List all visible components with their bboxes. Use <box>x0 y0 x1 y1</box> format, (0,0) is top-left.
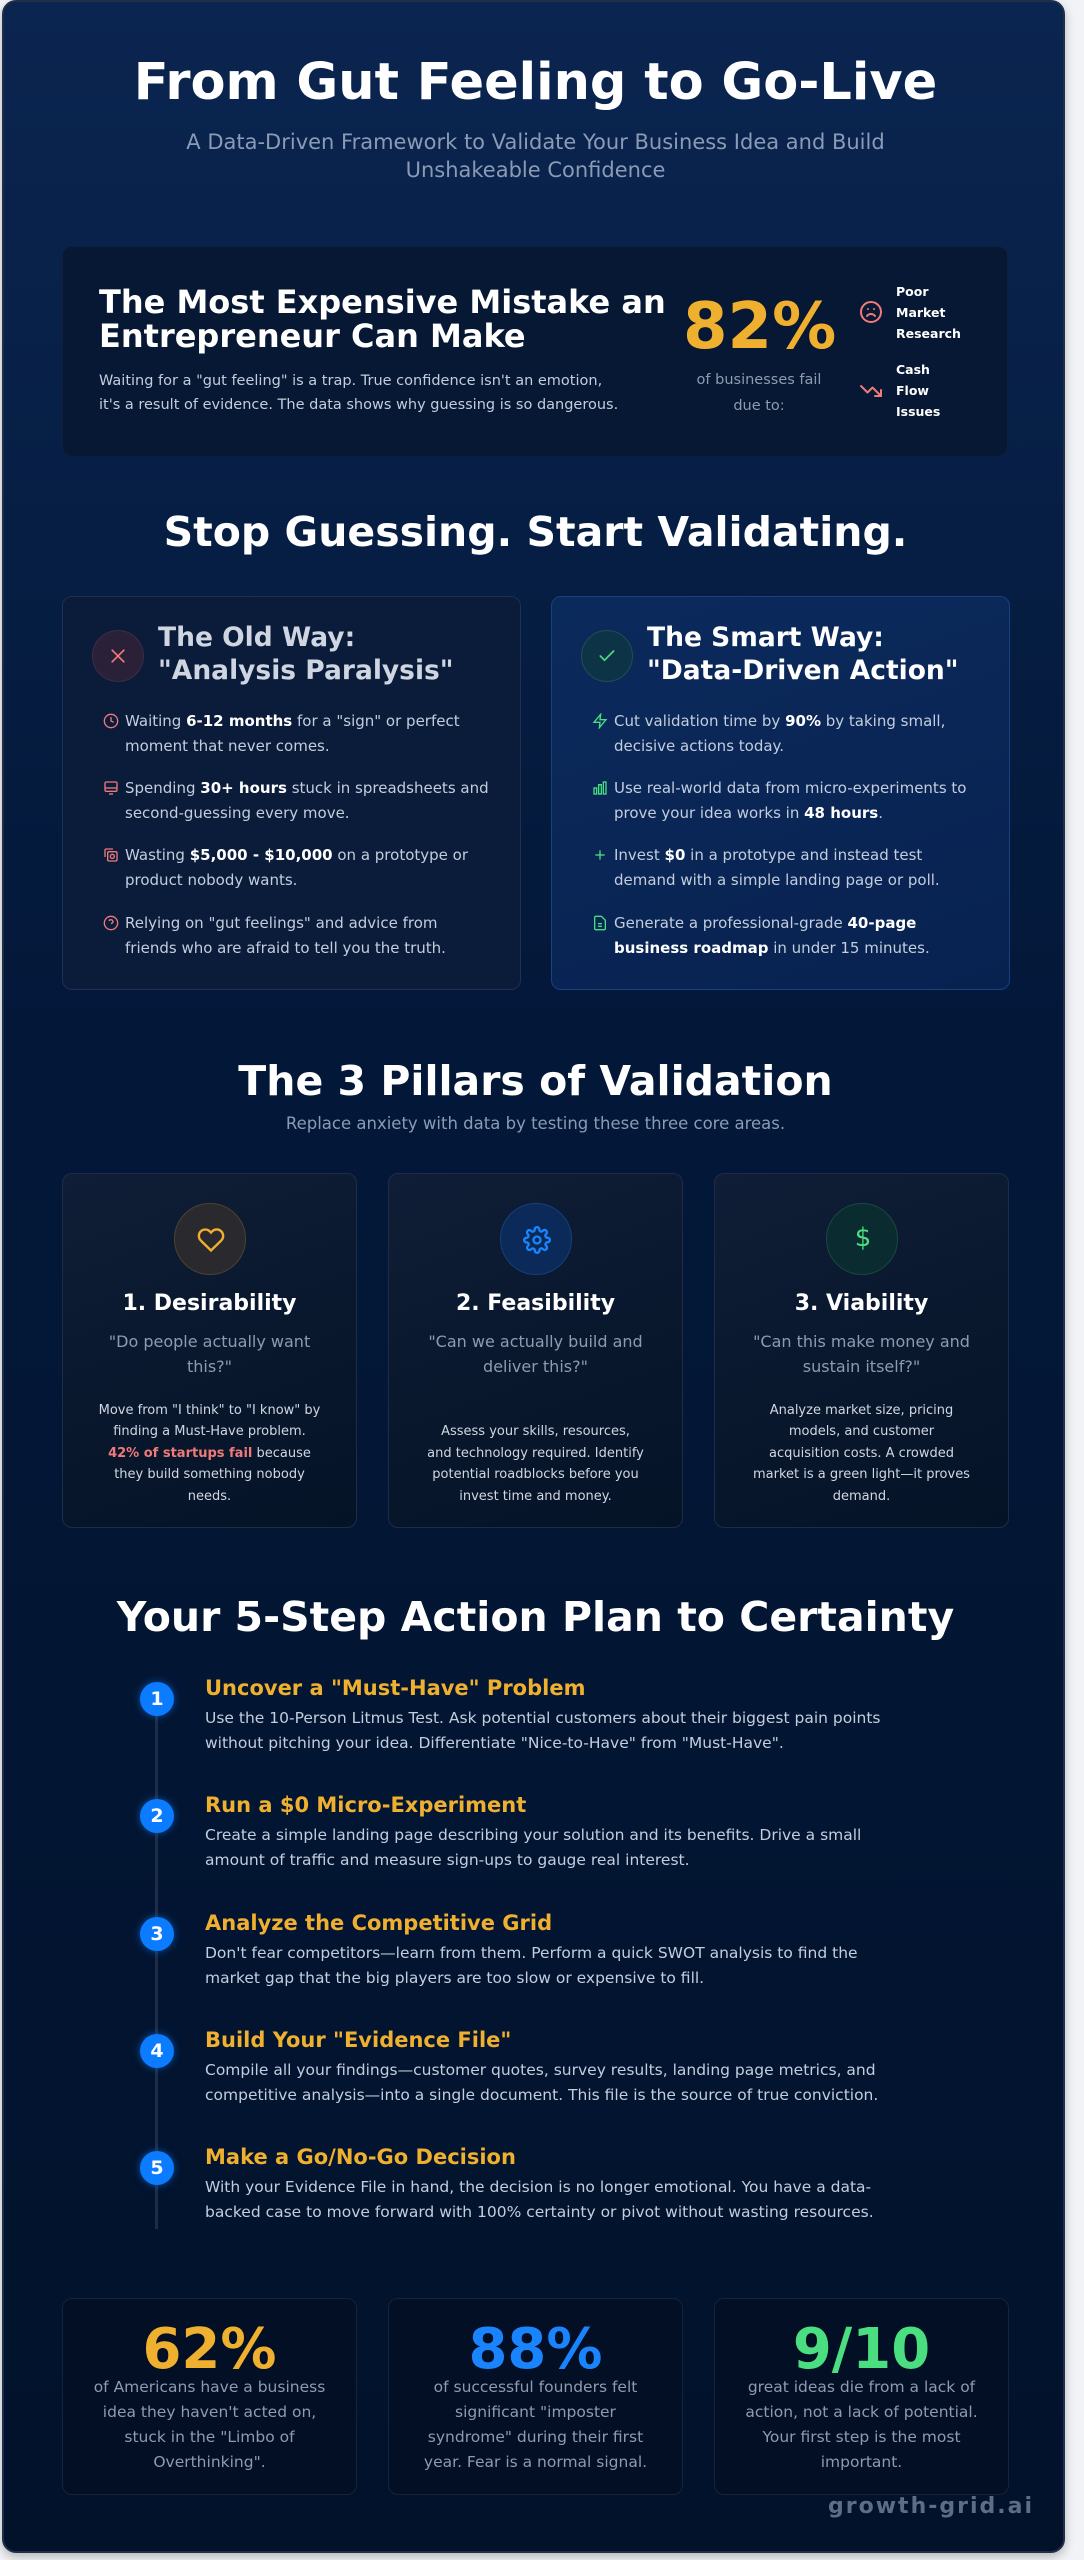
pillar: viability: models, and customer <box>789 1424 934 1439</box>
stat: 62%: 62% <box>142 2317 277 2382</box>
pillar: viability <box>714 1173 1009 1528</box>
icon: trend down <box>860 385 882 397</box>
stat: 9/10: great ideas die from a lack of action, not a lack of potential. Your first step is the most important. <box>745 2378 978 2471</box>
label: cash flow issues: Cash <box>896 362 930 377</box>
timeline: Use the 10-Person Litmus Test. Ask potential customers about their biggest pain points without pitching your idea. Differentiate "Nice-to-Have" from "Must-Have". <box>205 1709 880 1752</box>
pillar: feasibility <box>388 1173 683 1528</box>
label: poor market research: Research <box>896 326 961 341</box>
heading: stop guessing: Stop Guessing. Start Validating. <box>164 508 907 556</box>
stat: 82%: due to: <box>733 398 785 414</box>
heading: 3 pillars: The 3 Pillars of Validation <box>238 1057 833 1105</box>
list items <box>104 712 489 957</box>
timeline: Compile all your findings—customer quotes, survey results, landing page metrics, and competitive analysis—into a single document. This file is the source of true conviction. <box>205 2061 878 2104</box>
footer brand: growth-grid.ai <box>828 2494 1034 2519</box>
pillar: feasibility: "Can we actually build and deliver this?" <box>428 1332 643 1376</box>
subtitle: A Data-Driven Framework to Validate Your Business Idea and Build Unshakeable Confidence <box>186 130 885 182</box>
pillar: feasibility: Assess your skills, resources, <box>441 1424 630 1439</box>
stat: 88% <box>388 2298 683 2495</box>
label: poor market research <box>896 284 961 341</box>
step 5 <box>135 2145 874 2221</box>
heading <box>158 622 454 686</box>
pillar: feasibility: 2. Feasibility <box>456 1291 615 1316</box>
heading: The Old Way: <box>158 622 355 653</box>
timeline: Uncover a "Must-Have" Problem <box>205 1676 585 1700</box>
list items: Use real-world data from micro-experiments to prove your idea works in 48 hours. <box>614 779 966 822</box>
pillar: viability: "Can this make money and sustain itself?" <box>753 1332 970 1376</box>
timeline: Analyze the Competitive Grid <box>205 1911 552 1935</box>
label: poor market research: Poor <box>896 284 929 299</box>
list items: Wasting $5,000 - $10,000 on a prototype or product nobody wants. <box>125 846 468 889</box>
pillar: viability: acquisition costs. A crowded <box>769 1446 954 1460</box>
icon: dollar: $ <box>855 1223 871 1253</box>
timeline: Create a simple landing page describing your solution and its benefits. Drive a small amount of traffic and measure sign-ups to gauge real interest. <box>205 1826 861 1869</box>
stat: 82%: of businesses fail <box>697 372 821 388</box>
timeline: 2 <box>150 1805 164 1827</box>
stat: 62% <box>62 2298 357 2495</box>
icon: dollar <box>826 1203 898 1275</box>
stat: 62%: of Americans have a business idea they haven't acted on, stuck in the "Limbo of Overthinking". <box>94 2378 325 2471</box>
pillar: desirability: "Do people actually want this?" <box>109 1332 310 1376</box>
icon: gear <box>500 1203 572 1275</box>
pillar: viability: 3. Viability <box>795 1291 928 1316</box>
pillar: desirability <box>62 1173 357 1528</box>
timeline: 5 <box>150 2157 164 2179</box>
list items: Relying on "gut feelings" and advice from friends who are afraid to tell you the truth. <box>125 914 446 957</box>
pillar: viability: market is a green light—it proves <box>753 1467 970 1482</box>
list items: Invest $0 in a prototype and instead test demand with a simple landing page or poll. <box>614 846 940 889</box>
step 3 <box>135 1911 858 1987</box>
heading: "Analysis Paralysis" <box>158 655 454 686</box>
timeline: 1 <box>150 1688 164 1710</box>
heading <box>647 622 959 686</box>
pillar: feasibility: and technology required. Identify potential roadblocks before you invest time and money. <box>427 1446 644 1504</box>
heading: 5-step plan: Your 5-Step Action Plan to Certainty <box>117 1593 954 1641</box>
icon: heart <box>174 1203 246 1275</box>
pillars subtitle: Replace anxiety with data by testing these three core areas. <box>286 1114 785 1133</box>
timeline: Make a Go/No-Go Decision <box>205 2145 516 2169</box>
stat: 88%: 88% <box>468 2317 603 2382</box>
icon: check circle <box>581 630 633 682</box>
pillar: desirability: 1. Desirability <box>122 1291 297 1316</box>
label: cash flow issues <box>896 362 940 419</box>
step 2 <box>135 1793 861 1869</box>
heading: The Most Expensive Mistake an Entrepreneur Can Make <box>99 283 666 355</box>
pillar: desirability: Move from "I think" to "I know" by finding a Must-Have problem. 42% of startups fail because they build something nobody needs. <box>99 1402 320 1504</box>
list items: Spending 30+ hours stuck in spreadsheets and second-guessing every move. <box>125 779 489 822</box>
stat: 9/10 <box>714 2298 1009 2495</box>
timeline: Run a $0 Micro-Experiment <box>205 1793 526 1817</box>
timeline: 4 <box>150 2040 164 2062</box>
heading: The Smart Way: <box>647 622 884 653</box>
step 1 <box>135 1676 880 1752</box>
panel: smart way <box>551 596 1010 990</box>
stat: 82%: 82% <box>683 290 836 364</box>
timeline: With your Evidence File in hand, the decision is no longer emotional. You have a data-backed case to move forward with 100% certainty or pivot without wasting resources. <box>205 2178 874 2221</box>
body text: it's a result of evidence. The data shows why guessing is so dangerous. <box>99 397 618 413</box>
step 4 <box>135 2028 878 2104</box>
panel: most expensive mistake <box>62 246 1008 457</box>
stat: 9/10: 9/10 <box>793 2317 930 2382</box>
pillar: viability: demand. <box>833 1488 890 1504</box>
list items <box>592 712 966 957</box>
label: cash flow issues: Issues <box>896 404 940 419</box>
list items: Waiting 6-12 months for a "sign" or perfect moment that never comes. <box>125 712 460 755</box>
timeline: 3 <box>150 1923 164 1945</box>
list items: Cut validation time by 90% by taking small, decisive actions today. <box>614 712 945 755</box>
label: cash flow issues: Flow <box>896 383 929 398</box>
list items: Generate a professional-grade 40-page business roadmap in under 15 minutes. <box>614 914 930 957</box>
pillar: viability: Analyze market size, pricing <box>770 1402 953 1418</box>
heading: "Data-Driven Action" <box>647 655 959 686</box>
icon: sad face <box>860 301 882 323</box>
stat: 88%: of successful founders felt significant "imposter syndrome" during their first year. Fear is a normal signal. <box>424 2378 647 2471</box>
body text: Waiting for a "gut feeling" is a trap. True confidence isn't an emotion, <box>99 373 602 389</box>
timeline <box>135 1676 880 2229</box>
title: From Gut Feeling to Go-Live <box>134 53 937 112</box>
icon: x circle <box>92 630 144 682</box>
stat: 82% <box>683 290 836 414</box>
body text <box>99 373 618 413</box>
timeline: Don't fear competitors—learn from them. Perform a quick SWOT analysis to find the market gap that the big players are too slow or expensive to fill. <box>205 1944 858 1987</box>
timeline: Build Your "Evidence File" <box>205 2028 511 2052</box>
label: poor market research: Market <box>896 305 945 320</box>
panel: old way <box>62 596 521 990</box>
